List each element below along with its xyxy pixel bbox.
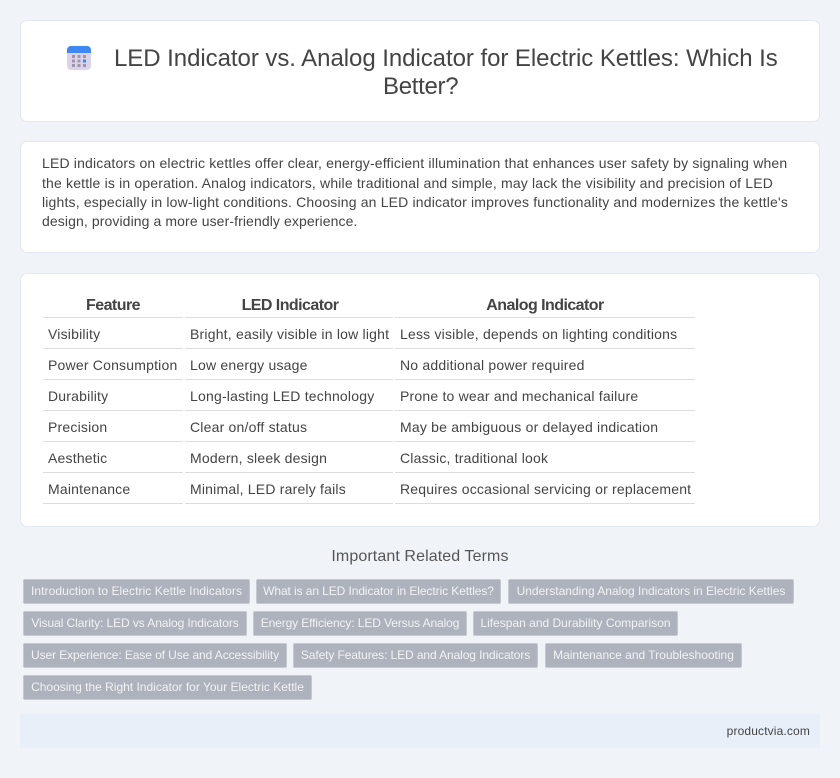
title <box>114 45 778 100</box>
row: precision: May be ambiguous or delayed indication <box>400 419 658 435</box>
row: aesthetic: Aesthetic <box>48 450 107 466</box>
row: power consumption: Low energy usage <box>190 357 308 373</box>
related term tags: Choosing the Right Indicator for Your Electric Kettle <box>31 680 304 694</box>
row: power consumption: No additional power required <box>400 357 585 373</box>
row: aesthetic <box>48 450 548 466</box>
related term tags: User Experience: Ease of Use and Accessibility <box>31 648 279 662</box>
row: durability: Long-lasting LED technology <box>190 388 374 404</box>
intro text: LED indicators on electric kettles offer clear, energy-efficient illumination that enhances user safety by signaling when <box>42 155 787 171</box>
row: durability <box>48 388 638 404</box>
header row: LED Indicator <box>242 297 338 314</box>
related term tags: Maintenance and Troubleshooting <box>553 648 734 662</box>
related term tags: Lifespan and Durability Comparison <box>480 616 671 630</box>
row: visibility: Visibility <box>48 326 100 342</box>
row: durability: Prone to wear and mechanical failure <box>400 388 638 404</box>
intro text: the kettle is in operation. Analog indicators, while traditional and simple, may lack the visibility and precision of LED <box>42 175 773 191</box>
footer source: productvia.com <box>727 724 810 738</box>
row: maintenance: Maintenance <box>48 481 130 497</box>
header row <box>86 297 604 314</box>
row: visibility: Bright, easily visible in low light <box>190 326 389 342</box>
comparison table panel <box>20 273 820 527</box>
title: Better? <box>383 73 458 100</box>
row: visibility: Less visible, depends on lighting conditions <box>400 326 677 342</box>
row: precision <box>48 419 658 435</box>
header panel <box>20 20 820 122</box>
related term tags <box>23 579 794 700</box>
related term tags: Visual Clarity: LED vs Analog Indicators <box>31 616 239 630</box>
related terms heading: Important Related Terms <box>331 548 509 565</box>
related term tags: Safety Features: LED and Analog Indicators <box>301 648 530 662</box>
row: precision: Clear on/off status <box>190 419 307 435</box>
row: maintenance: Requires occasional servicing or replacement <box>400 481 691 497</box>
intro panel <box>20 141 820 253</box>
title: LED Indicator vs. Analog Indicator for Electric Kettles: Which Is <box>114 45 778 72</box>
row: maintenance <box>48 481 691 497</box>
related term tags: Understanding Analog Indicators in Electric Kettles <box>517 584 785 598</box>
row: visibility <box>48 326 677 342</box>
intro text <box>42 155 788 229</box>
related term tags: Energy Efficiency: LED Versus Analog <box>261 616 459 630</box>
icon: calendar grid <box>67 46 91 70</box>
row: durability: Durability <box>48 388 108 404</box>
row: power consumption <box>48 357 585 373</box>
header row: Feature <box>86 297 140 314</box>
header row: Analog Indicator <box>486 297 604 314</box>
intro text: lights, especially in low-light conditions. Choosing an LED indicator improves functionality and modernizes the kettle's <box>42 194 788 210</box>
row: aesthetic: Classic, traditional look <box>400 450 548 466</box>
comparison table <box>43 297 695 504</box>
related term tags: What is an LED Indicator in Electric Kettles? <box>263 584 494 598</box>
row: aesthetic: Modern, sleek design <box>190 450 327 466</box>
row: power consumption: Power Consumption <box>48 357 177 373</box>
footer bar <box>20 714 820 748</box>
row: precision: Precision <box>48 419 107 435</box>
related term tags: Introduction to Electric Kettle Indicators <box>31 584 242 598</box>
intro text: design, providing a more user-friendly experience. <box>42 213 358 229</box>
row: maintenance: Minimal, LED rarely fails <box>190 481 346 497</box>
